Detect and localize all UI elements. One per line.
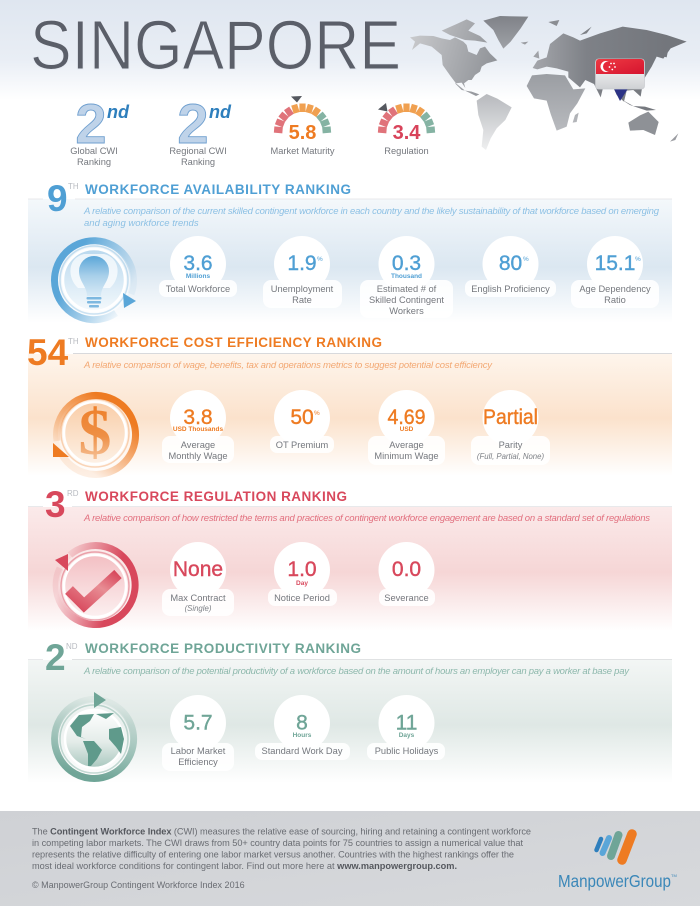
footer text: in competing labor markets. The CWI draws from 50+ country data points for 75 countries to assign a numerical value that — [32, 838, 523, 848]
stat: average monthly wage: Average — [181, 440, 215, 450]
stat: age dependency ratio: Age Dependency — [579, 284, 651, 294]
footer panel — [0, 811, 700, 906]
stat: public holidays: 11 — [396, 712, 417, 734]
rank: 54th: 54 — [27, 332, 69, 373]
panel: workforce availability — [28, 178, 672, 323]
stat: skilled contingent workers — [360, 236, 453, 318]
stat: standard work day: Hours — [293, 732, 312, 739]
rank: 3rd: 3 — [45, 484, 66, 525]
stat: skilled contingent workers: Estimated # of — [377, 284, 437, 294]
stat: age dependency ratio: Ratio — [604, 295, 626, 305]
stat: age dependency ratio — [571, 236, 659, 308]
description: availability: A relative comparison of the current skilled contingent workforce in each country and the likely sustainability of that workforce based on emerging — [83, 206, 660, 217]
stat: global CWI ranking: Ranking — [77, 157, 111, 167]
stat: OT premium: % — [314, 410, 320, 417]
rank: 3rd: RD — [67, 489, 79, 498]
description: regulation: A relative comparison of how restricted the terms and practices of contingent workforce engagement are based on a standard set of regulations — [83, 513, 650, 524]
stat: english proficiency — [465, 236, 556, 297]
description: availability: and aging workforce trends — [84, 218, 199, 229]
stat: standard work day: Standard Work Day — [262, 746, 343, 756]
stat: OT premium: OT Premium — [276, 440, 329, 450]
stat: average monthly wage: Monthly Wage — [168, 451, 228, 461]
logo: ManpowerGroup: ManpowerGroup — [558, 871, 671, 891]
world map with Singapore flag marker — [410, 16, 687, 150]
stat: severance: Severance — [384, 593, 429, 603]
stat: unemployment rate: 1.9 — [287, 252, 317, 275]
stat: max contract — [162, 542, 234, 616]
logo: ManpowerGroup — [558, 834, 677, 891]
stat: age dependency ratio: % — [635, 256, 641, 263]
gauge: market maturity: 5.8 — [289, 122, 316, 144]
stat: average minimum wage: USD — [400, 426, 414, 433]
stat: labor market efficiency: Efficiency — [178, 757, 218, 767]
gauge: regulation: Regulation — [384, 146, 429, 156]
stat: public holidays: Public Holidays — [375, 746, 439, 756]
stat: regional CWI ranking: 2 — [177, 92, 209, 155]
stat: skilled contingent workers: Workers — [389, 306, 424, 316]
stat: labor market efficiency: Labor Market — [171, 746, 226, 756]
description: cost efficiency: A relative comparison of wage, benefits, tax and operations metrics to suggest potential cost efficiency — [83, 360, 493, 371]
heading: cost efficiency: WORKFORCE COST EFFICIENCY RANKING — [85, 335, 382, 350]
footer text: The Contingent Workforce Index (CWI) measures the relative ease of sourcing, hiring and retaining a contingent workforce — [32, 826, 531, 836]
stat: notice period: Day — [296, 580, 308, 587]
icon: dollar sign: $ — [78, 396, 112, 469]
footer text — [32, 826, 531, 890]
stat: OT premium — [270, 390, 334, 453]
stat: public holidays: Days — [399, 732, 415, 739]
stat: labor market efficiency — [162, 695, 234, 771]
stat: standard work day: 8 — [296, 712, 308, 734]
description: productivity: A relative comparison of the potential productivity of a workforce based on the amount of hours an employer can pay a worker at base pay — [83, 666, 630, 677]
stat: english proficiency: English Proficiency — [471, 284, 550, 294]
stat: labor market efficiency: 5.7 — [183, 712, 213, 734]
stat: total workforce: Millions — [186, 273, 210, 280]
stat: notice period — [268, 542, 337, 606]
stat: severance — [378, 542, 435, 606]
rank: 9th: TH — [68, 182, 79, 191]
gauge: regulation: 3.4 — [393, 122, 421, 144]
stat: parity: Parity — [499, 440, 523, 450]
stat: global CWI ranking: 2 — [75, 92, 107, 155]
panel: workforce regulation — [28, 484, 672, 631]
stat: average minimum wage — [368, 390, 445, 465]
stat: average minimum wage: 4.69 — [388, 406, 426, 429]
stat: max contract: (Single) — [185, 604, 212, 613]
stat: parity: Partial — [483, 406, 538, 429]
stat: unemployment rate: % — [317, 256, 323, 263]
stat: parity — [471, 390, 550, 465]
stat: unemployment rate: Rate — [292, 295, 312, 305]
stat: notice period: Notice Period — [274, 593, 330, 603]
stat: english proficiency: 80 — [499, 252, 522, 275]
icon: globe — [55, 692, 134, 778]
stat: global CWI ranking: Global CWI — [70, 146, 118, 156]
stat: total workforce: Total Workforce — [166, 284, 230, 294]
stat: parity: (Full, Partial, None) — [477, 452, 544, 461]
stat: age dependency ratio: 15.1 — [595, 252, 635, 275]
stat: regional CWI ranking: nd — [209, 102, 232, 122]
stat: regional CWI ranking — [169, 92, 232, 167]
heading: regulation: WORKFORCE REGULATION RANKING — [85, 489, 347, 504]
stat: max contract: Max Contract — [170, 593, 226, 603]
stat: global CWI ranking — [70, 92, 130, 167]
title: SINGAPORE — [30, 6, 401, 84]
stat: average minimum wage: Average — [389, 440, 424, 450]
gauge: regulation — [378, 103, 435, 156]
rank: 2nd: 2 — [45, 637, 66, 678]
logo: ManpowerGroup: TM — [671, 873, 677, 878]
footer text: most ideal workforce conditions for contingent labor. Find out more here at www.manpowergroup.com. — [32, 861, 457, 871]
stat: average monthly wage: USD Thousands — [173, 426, 223, 433]
rank: 2nd: ND — [66, 642, 78, 651]
heading: availability: WORKFORCE AVAILABILITY RANKING — [85, 182, 351, 197]
rank: 9th — [47, 178, 79, 219]
stat: unemployment rate: Unemployment — [271, 284, 334, 294]
stat: skilled contingent workers: Thousand — [391, 273, 422, 280]
stat: unemployment rate — [263, 236, 342, 308]
description: availability — [83, 206, 660, 229]
stat: severance: 0.0 — [392, 558, 421, 581]
icon: light bulb — [54, 241, 136, 320]
stat: regional CWI ranking: Ranking — [181, 157, 215, 167]
rank: 3rd — [45, 484, 79, 525]
stat: global CWI ranking: nd — [107, 102, 130, 122]
icon: dollar sign — [53, 395, 136, 474]
header background — [0, 0, 700, 100]
stat: english proficiency: % — [523, 256, 529, 263]
panel: workforce cost efficiency — [27, 332, 672, 476]
stat: total workforce: 3.6 — [183, 252, 213, 275]
footer text: © ManpowerGroup Contingent Workforce Index 2016 — [32, 880, 245, 890]
icon: check mark — [55, 546, 135, 625]
panel: workforce productivity — [28, 637, 672, 783]
stat: regional CWI ranking: Regional CWI — [169, 146, 227, 156]
stat: OT premium: 50 — [290, 406, 314, 429]
flag pin — [613, 87, 629, 101]
heading: productivity: WORKFORCE PRODUCTIVITY RANKING — [85, 641, 361, 656]
stat: max contract: None — [173, 558, 223, 581]
footer text: represents the relative difficulty of entering one labor market versus another. Countries with the highest rankings offer the — [32, 850, 514, 860]
stat: public holidays — [367, 695, 445, 760]
gauge: market maturity: Market Maturity — [270, 146, 335, 156]
stat: skilled contingent workers: Skilled Contingent — [369, 295, 444, 305]
stat: standard work day — [255, 695, 350, 760]
stat: average minimum wage: Minimum Wage — [374, 451, 439, 461]
stat: skilled contingent workers: 0.3 — [392, 252, 421, 275]
rank: 9th: 9 — [47, 178, 68, 219]
gauge: market maturity — [270, 96, 335, 156]
stat: average monthly wage: 3.8 — [183, 406, 213, 429]
stat: average monthly wage — [162, 390, 234, 463]
stat: notice period: 1.0 — [287, 558, 317, 581]
rank: 2nd — [45, 637, 78, 678]
stat: total workforce — [159, 236, 237, 297]
rank: 54th: TH — [68, 337, 79, 346]
